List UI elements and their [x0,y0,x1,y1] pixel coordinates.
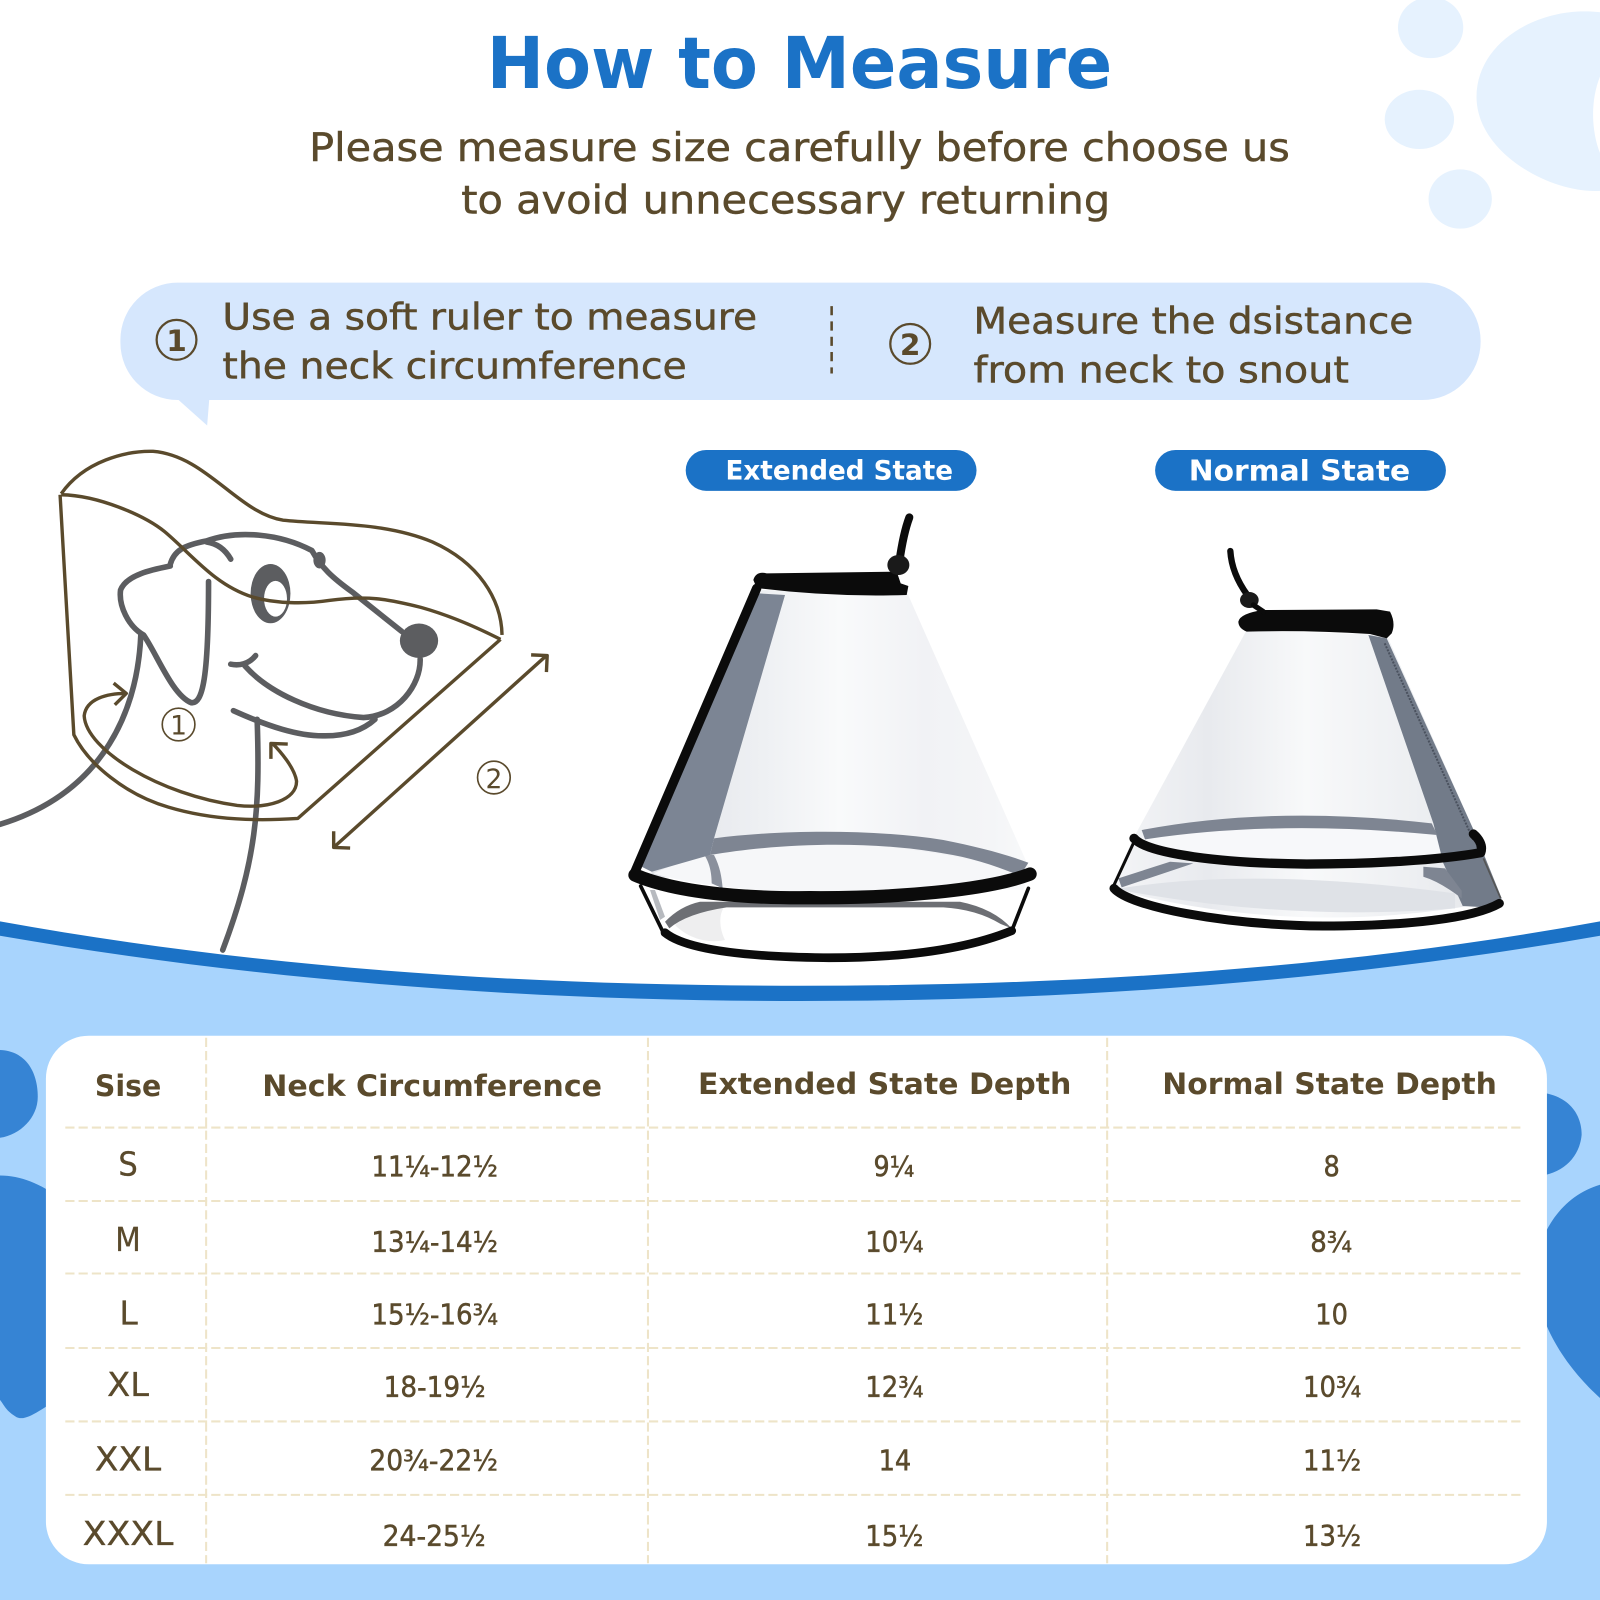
table header [95,1067,1497,1103]
extended state label [686,450,977,491]
row M: M [115,1221,141,1259]
subtitle: Please measure size carefully before choose us [309,126,1290,171]
row XXXL: 15½ [865,1519,923,1553]
row XL: 10¾ [1303,1370,1361,1404]
row XXL [95,1440,1361,1478]
row XXXL: XXXL [83,1515,174,1553]
row L: 11½ [865,1297,923,1331]
row XXXL [83,1515,1361,1553]
row L: L [119,1294,139,1332]
neck circumference arrow [84,683,297,806]
row S: 9¼ [873,1150,914,1184]
subtitle: to avoid unnecessary returning [461,178,1110,223]
cone outline [60,451,502,820]
marker 1 [162,708,195,742]
table header: Sise [95,1069,161,1103]
row S [118,1146,1340,1184]
row S: S [118,1146,138,1184]
row XXXL: 24-25½ [383,1519,486,1553]
step 2 text: Measure the dsistance [973,300,1413,343]
background paws lower [0,1050,1600,1418]
row XL [107,1366,1361,1404]
normal state label: Normal State [1189,454,1410,488]
row S: 8 [1323,1150,1340,1184]
column dividers [206,1038,1107,1563]
extended cone photo [635,517,1030,958]
marker 1: 1 [170,711,187,742]
marker 2: 2 [485,764,502,795]
row L: 15½-16¾ [371,1297,498,1331]
row M [115,1221,1352,1259]
row XL: 12¾ [865,1370,923,1404]
lower light blue background with wave [0,921,1600,1600]
normal state label [1155,450,1446,491]
extended state label: Extended State [726,456,953,487]
row M: 13¼-14½ [371,1225,498,1259]
marker 2 [478,761,510,795]
step 2 text [973,300,1413,392]
table header: Normal State Depth [1162,1067,1497,1101]
row XXL: 20¾-22½ [369,1443,498,1477]
step 2 number [890,324,930,364]
row XXL: 14 [879,1443,911,1477]
step 1 number: 1 [166,324,187,358]
title: How to Measure [487,22,1112,105]
row L [119,1294,1348,1332]
subtitle [309,126,1290,223]
instruction speech bubble [120,283,1481,426]
row dividers [65,1128,1521,1495]
row M: 10¼ [865,1225,923,1259]
step 1 text [222,296,757,388]
row XXXL: 13½ [1303,1519,1361,1553]
step 2 text: from neck to snout [973,349,1349,392]
row XL: 18-19½ [384,1370,486,1404]
row M: 8¾ [1310,1225,1352,1259]
background paw top right [1385,0,1600,229]
dog outline [0,535,438,950]
table header: Neck Circumference [262,1069,602,1103]
step 1 number [157,320,196,360]
row XXL: 11½ [1303,1443,1361,1477]
row L: 10 [1315,1297,1348,1331]
step 2 number: 2 [900,328,921,362]
step 1 text: the neck circumference [222,345,687,388]
dog measuring diagram [0,451,547,950]
snout distance arrow [334,655,547,848]
row XL: XL [107,1366,150,1404]
table header: Extended State Depth [698,1067,1071,1101]
step 1 text: Use a soft ruler to measure [222,296,757,339]
row S: 11¼-12½ [371,1150,498,1184]
row XXL: XXL [95,1440,162,1478]
normal cone photo [1111,551,1502,926]
size table [46,1036,1547,1564]
